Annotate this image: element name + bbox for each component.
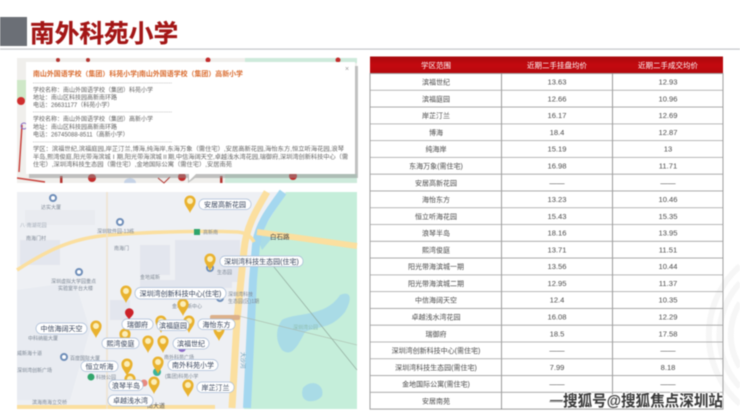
map place labels: 深圳虚拟大学园重点: [51, 278, 96, 285]
map place labels: 金地威新中心: [172, 303, 202, 310]
school two details: 电话：26745088-8511（高新小学）: [33, 130, 129, 138]
map place labels: 南海门村: [26, 235, 46, 242]
map points of interest: [50, 195, 240, 386]
map place labels: 达实大厦: [41, 204, 61, 211]
school two details: 地址：南山区科技园高新南环路: [33, 123, 117, 131]
map estate labels: 深圳湾科技生态园(住宅): [224, 257, 299, 266]
map place labels: (集团)科苑小学: [165, 373, 198, 380]
popup close icon: ×: [345, 66, 349, 73]
map place labels: 滨海南海立交桥: [32, 399, 67, 406]
table rows: 熙湾俊庭: [422, 245, 450, 254]
map river 大沙河: [247, 192, 283, 408]
table rows: 东海万象(需住宅): [409, 162, 463, 170]
panel: school info map with popup: [17, 58, 358, 183]
map estate labels: 滨福庭园: [159, 321, 187, 330]
table rows: 12.69: [658, 111, 678, 120]
table rows: 金地国际公寓(需住宅): [402, 380, 470, 389]
table rows: 13.56: [547, 262, 567, 271]
school two details: [33, 112, 172, 138]
map residential blocks: [17, 210, 240, 400]
table rows: 12.87: [658, 128, 678, 137]
popup heading: 南山外国语学校（集团）科苑小学|南山外国语学校（集团）高新小学: [33, 69, 243, 78]
table rows: 博海: [429, 128, 443, 137]
map place labels: 百度国际大厦: [70, 355, 100, 362]
map estate labels: 滨福世纪: [177, 339, 205, 348]
table rows: 18.16: [547, 229, 567, 238]
map place labels: 生态园(区)1期: [228, 298, 259, 305]
map place labels: 深圳软件园-13栋: [97, 228, 134, 235]
table rows: ——: [549, 396, 565, 405]
table rows: 卓越浅水湾花园: [412, 312, 460, 322]
top map strip: [17, 58, 357, 183]
table rows: 纯海岸: [426, 145, 446, 154]
popup card: [26, 62, 358, 183]
table header: 近期二手成交均价: [638, 60, 698, 70]
map place labels: 南外科苑广场: [164, 354, 194, 361]
table rows: 13: [664, 145, 672, 154]
school one details: 电话：26631177（科苑小学）: [33, 101, 113, 109]
map place labels: 八·南湖花园: [20, 222, 47, 229]
map pins: [90, 196, 225, 397]
table rows: 12.93: [658, 78, 678, 87]
table rows: 安居南苑: [422, 396, 450, 405]
table grid: [370, 74, 723, 409]
catchment area list: 住宅）,深圳湾科技生态园（需住宅）,金地国际公寓（需住宅）,安居南苑: [33, 160, 232, 168]
table rows: 7.99: [550, 363, 564, 372]
table rows: 13.95: [658, 229, 678, 238]
table rows: 15.35: [658, 212, 678, 221]
map estate labels: 海怡东方: [202, 320, 230, 329]
school two details: 学校名称：南山外国语学校（集团）高新小学: [33, 115, 153, 123]
map park: [244, 192, 357, 409]
map place labels: 生态园: [217, 269, 232, 276]
table rows: 恒立听海花园: [415, 212, 457, 221]
table rows: 深圳湾科技生态园(需住宅): [395, 363, 477, 372]
map place labels: 深圳湾公园: [293, 324, 318, 331]
table rows: ——: [660, 346, 676, 355]
title rule: [0, 48, 740, 50]
table rows: 岸芷汀兰: [422, 111, 450, 120]
map estate labels: 卓越浅水湾: [113, 396, 148, 405]
table rows: 安居高新花园: [415, 178, 457, 187]
table rows: 10.35: [658, 296, 678, 305]
table header: 近期二手挂盘均价: [527, 60, 587, 70]
table rows: 16.08: [547, 312, 567, 322]
table rows: ——: [660, 380, 676, 389]
map estate labels: 中信海阔天空: [40, 324, 82, 333]
map place labels: 实验室平台大楼: [58, 285, 93, 292]
table rows: 18.4: [550, 128, 564, 137]
title: 南外科苑小学: [30, 14, 178, 50]
table rows: 阳光带海滨城二期: [408, 279, 464, 288]
table rows: 10.44: [658, 262, 678, 271]
table rows: 滨福世纪: [422, 78, 450, 87]
table header: 学区范围: [421, 60, 451, 70]
panel: price table: [370, 56, 723, 409]
map estate labels: 岸芷汀兰: [202, 383, 230, 392]
map estate labels: 浪琴半岛: [112, 381, 140, 390]
road label 南海大道: 南大道: [147, 402, 165, 410]
panel: area map: [17, 192, 357, 410]
table rows: 12.4: [550, 296, 564, 305]
school one details: [33, 83, 172, 109]
school one details: 地址：南山区科技园高新南环路: [33, 94, 117, 102]
table rows: ——: [549, 380, 565, 389]
background watermark rings: [709, 266, 740, 404]
table rows: 10.96: [658, 94, 678, 103]
table rows: 深圳湾创新科技中心(需住宅): [392, 346, 480, 355]
map place labels: 深圳湾科技: [228, 291, 253, 298]
school one details: 学校名称：南山外国语学校（集团）科苑小学: [33, 86, 153, 94]
table rows: ——: [660, 178, 676, 187]
table rows: 13.71: [547, 245, 567, 254]
table rows: 10.46: [658, 195, 678, 204]
table rows: 中信海阔天空: [415, 296, 457, 305]
table rows: 11.51: [659, 245, 677, 254]
map place labels: 中科纳能大厦: [28, 335, 58, 342]
table rows: 11.71: [659, 162, 677, 170]
table header: [370, 56, 723, 74]
table rows: 16.98: [547, 162, 567, 170]
map place labels: 深圳湾创新广场: [17, 367, 52, 374]
table rows: 15.43: [547, 212, 567, 221]
map estate labels: 安居高新花园: [204, 200, 246, 209]
map place labels: 威新海十道: [17, 350, 42, 357]
table rows: 15.19: [547, 145, 567, 154]
table rows: 海怡东方: [422, 195, 450, 204]
source watermark: 搜狐号@搜狐焦点深圳站: [563, 391, 723, 410]
map place labels: 科技公园: [96, 374, 116, 381]
table rows: ——: [549, 178, 565, 187]
map place labels: 金地威新: [140, 274, 160, 281]
table rows: 11.37: [659, 279, 677, 288]
map estate labels: 恒立听海: [86, 362, 114, 371]
table rows: 浪琴半岛: [422, 229, 450, 238]
catchment area list: [33, 142, 348, 168]
table rows: 12.95: [547, 279, 567, 288]
table rows: 12.66: [547, 94, 567, 103]
table rows: 8.18: [661, 363, 675, 372]
table rows: ——: [549, 346, 565, 355]
map roads: [17, 192, 357, 409]
table rows: 阳光带海滨城一期: [408, 262, 464, 271]
table rows: 18.5: [550, 329, 564, 338]
table rows: 12.29: [658, 312, 678, 322]
map lakes: [258, 232, 350, 401]
catchment area list: 半岛,熙湾俊庭,阳光带海滨城Ⅰ期,阳光带海滨城Ⅱ期,中信海阔天空,卓越浅水湾花园,瑞御府,深圳湾创新科技中心（需: [33, 153, 348, 161]
title marker square: [0, 17, 27, 46]
river label 大沙河: 大沙河: [239, 352, 247, 369]
map estate labels: 南外科苑小学: [172, 360, 214, 370]
table rows: 瑞御府: [426, 329, 446, 338]
map place labels: [17, 204, 318, 406]
road label 白石路: 白石路: [270, 232, 290, 241]
catchment area list: 学区：滨福世纪,滨福庭园,岸芷汀兰,博海,纯海岸,东海万象（需住宅）,安居高新花园,海怡东方,恒立听海花园,浪琴: [33, 145, 344, 153]
table rows: 16.17: [547, 111, 567, 120]
map place labels: 南海门: [114, 245, 129, 252]
title bar: [0, 14, 740, 50]
table rows: 13.23: [547, 195, 567, 204]
map base: [17, 192, 357, 409]
map estate labels: [36, 199, 303, 406]
map estate labels: 瑞御府: [127, 320, 148, 329]
table rows: 滨福庭园: [422, 94, 450, 103]
table rows: 13.63: [547, 78, 567, 87]
map estate labels: 熙湾俊庭: [106, 339, 134, 348]
table rows: 17.58: [658, 329, 678, 338]
map estate labels: 深圳湾创新科技中心(住宅): [140, 289, 221, 298]
map place labels: 高新南: [203, 229, 218, 236]
table rows: [392, 78, 678, 405]
